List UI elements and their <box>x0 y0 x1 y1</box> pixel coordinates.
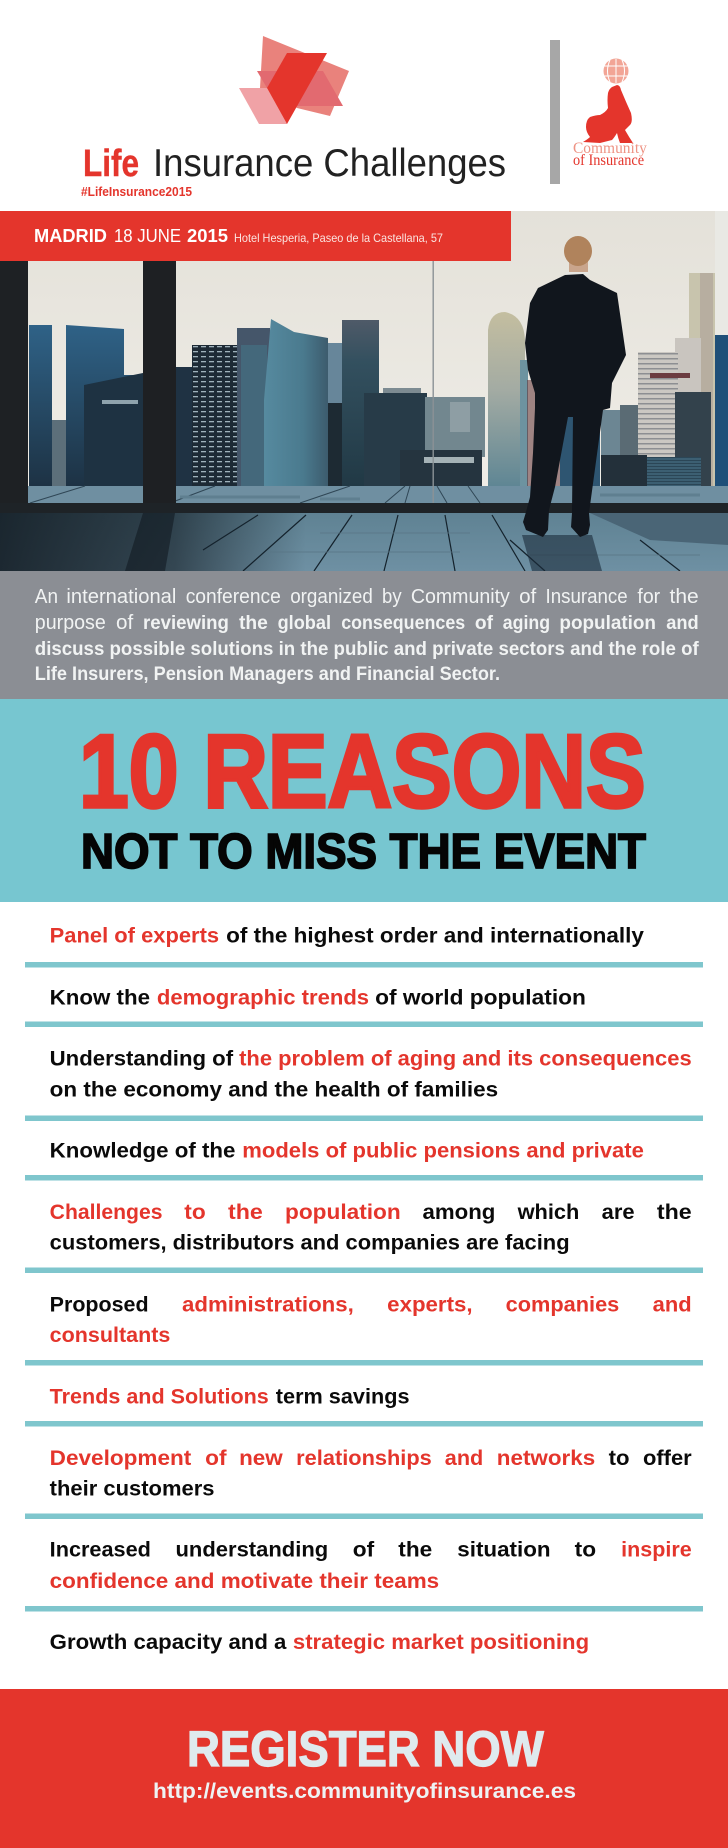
reason 3: on the economy and the health of families <box>50 1078 498 1101</box>
reason 9 <box>50 1539 692 1593</box>
description text: the <box>239 613 268 634</box>
reason 9: the <box>398 1539 432 1562</box>
reason 3: Understanding of <box>50 1048 234 1071</box>
logo wordmark: of Insurance <box>573 151 644 169</box>
icon: seal <box>583 85 633 143</box>
hero photo: businessman looking at skyline <box>0 211 728 571</box>
reason 10 <box>50 1631 589 1654</box>
description text: population <box>559 613 656 634</box>
reason 6: companies <box>506 1293 619 1316</box>
description text: conference <box>186 586 281 608</box>
reason 6: consultants <box>50 1324 170 1347</box>
register now heading: REGISTER NOW <box>187 1722 545 1777</box>
reason 5: which <box>517 1201 579 1224</box>
description text: of <box>519 586 537 608</box>
reason 6: experts, <box>387 1293 473 1316</box>
heading: 10 REASONS: 10 REASONS <box>79 713 646 830</box>
logo wordmark: Community <box>573 140 647 157</box>
subheading: not to miss the event: NOT TO MISS THE EVENT <box>81 825 646 879</box>
description text: aging <box>503 613 550 634</box>
description text: for <box>637 586 661 608</box>
window frame: columns and beam <box>0 261 728 513</box>
reason 9: understanding <box>176 1539 328 1562</box>
reason 8: new <box>239 1447 283 1470</box>
description text: of <box>475 613 494 634</box>
terrace floor behind the glass <box>0 486 728 503</box>
reason 4 <box>50 1140 644 1163</box>
description text: the <box>670 586 699 608</box>
date and venue banner: Hotel Hesperia, Paseo de la Castellana, 57 <box>234 231 443 245</box>
reason 8: Development <box>50 1447 191 1470</box>
reason 5: population <box>285 1201 401 1224</box>
conference logo: overlapping red shapes <box>239 36 349 124</box>
reason 1: Panel of experts <box>50 925 219 948</box>
reason 9: inspire <box>621 1539 692 1562</box>
description text: Insurance <box>546 586 628 608</box>
hashtag: #LifeInsurance2015 <box>81 185 192 199</box>
reason 5 <box>50 1201 692 1255</box>
description text: international <box>66 586 176 608</box>
reason 4: Knowledge of the <box>50 1140 235 1163</box>
description text: Life Insurers, Pension Managers and Financial Sector. <box>35 664 500 685</box>
description text: organized <box>290 586 373 608</box>
panel: conference description <box>0 571 728 699</box>
reason 3: the problem of aging and its consequences <box>239 1048 692 1071</box>
reason 5: customers, distributors and companies are facing <box>50 1232 570 1255</box>
description text: of <box>116 612 134 634</box>
reason 8: and <box>445 1447 483 1470</box>
description text: global <box>278 613 331 634</box>
vertical grey separator <box>550 40 560 184</box>
reason 5: Challenges <box>50 1201 163 1224</box>
description text: purpose <box>35 612 106 634</box>
reason 2: Know the <box>50 986 150 1009</box>
reason 7: term savings <box>276 1385 410 1408</box>
reason 8: of <box>205 1447 228 1470</box>
description text <box>35 586 699 685</box>
logo wordmark <box>573 140 647 169</box>
reason 5: to <box>184 1201 206 1224</box>
reason 6: administrations, <box>182 1293 354 1316</box>
reason 2 <box>50 986 586 1009</box>
reason 8: networks <box>497 1447 595 1470</box>
reason 7: Trends and Solutions <box>50 1385 269 1408</box>
logo: Community of Insurance seal <box>573 58 647 169</box>
reason 10: Growth capacity and a <box>50 1631 287 1654</box>
reason 10: strategic market positioning <box>293 1631 589 1654</box>
reason 2: of world population <box>375 986 586 1009</box>
date and venue banner: MADRID <box>34 226 107 246</box>
sky <box>0 211 728 491</box>
reason 3 <box>50 1048 692 1101</box>
foreground floor <box>0 513 728 571</box>
panel: 10 reasons heading <box>0 699 728 902</box>
reason 4: models of public pensions and private <box>242 1140 644 1163</box>
date and venue banner: 2015 <box>187 226 228 246</box>
reason 1 <box>50 925 644 948</box>
reason 5: the <box>228 1201 263 1224</box>
description text: consequences <box>341 613 465 634</box>
registration url: http://events.communityofinsurance.es <box>153 1780 576 1803</box>
description text: reviewing <box>143 613 229 634</box>
reason 2: demographic trends <box>157 986 369 1009</box>
reason 5: the <box>657 1201 692 1224</box>
reason 9: situation <box>457 1539 551 1562</box>
reason 9: to <box>575 1539 596 1562</box>
reason 8 <box>50 1447 692 1501</box>
reason 9: of <box>353 1539 375 1562</box>
reason 5: among <box>422 1201 495 1224</box>
reason 9: confidence and motivate their teams <box>50 1570 439 1593</box>
reason 5: are <box>602 1201 635 1224</box>
title: Life Insurance Challenges: Insurance Challenges <box>153 142 506 185</box>
panel: register call to action <box>0 1689 728 1848</box>
reason 6: Proposed <box>50 1293 149 1316</box>
reasons list <box>25 925 703 1654</box>
reason 9: Increased <box>50 1539 151 1562</box>
right image seam strip <box>715 211 728 335</box>
date and venue banner: 18 JUNE <box>114 226 181 246</box>
reason 6: and <box>653 1293 692 1316</box>
reason 1: of the highest order and internationally <box>226 925 644 948</box>
description text: by <box>382 586 402 608</box>
date and venue banner <box>0 211 511 261</box>
reason 8: their customers <box>50 1478 215 1501</box>
description text: and <box>666 613 699 634</box>
city skyline <box>29 273 728 486</box>
title: Life Insurance Challenges: Life <box>83 142 139 185</box>
man: suit silhouette <box>523 274 626 537</box>
reason 6 <box>50 1293 692 1347</box>
reason 8: offer <box>643 1447 692 1470</box>
reason 7 <box>50 1385 409 1408</box>
icon: globe <box>604 58 628 84</box>
description text: Community <box>411 586 510 608</box>
man: head <box>564 236 592 275</box>
description text: An <box>35 586 58 608</box>
reason 8: relationships <box>296 1447 432 1470</box>
reason 8: to <box>609 1447 630 1470</box>
description text: discuss possible solutions in the public and private sectors and the role of <box>35 639 699 660</box>
